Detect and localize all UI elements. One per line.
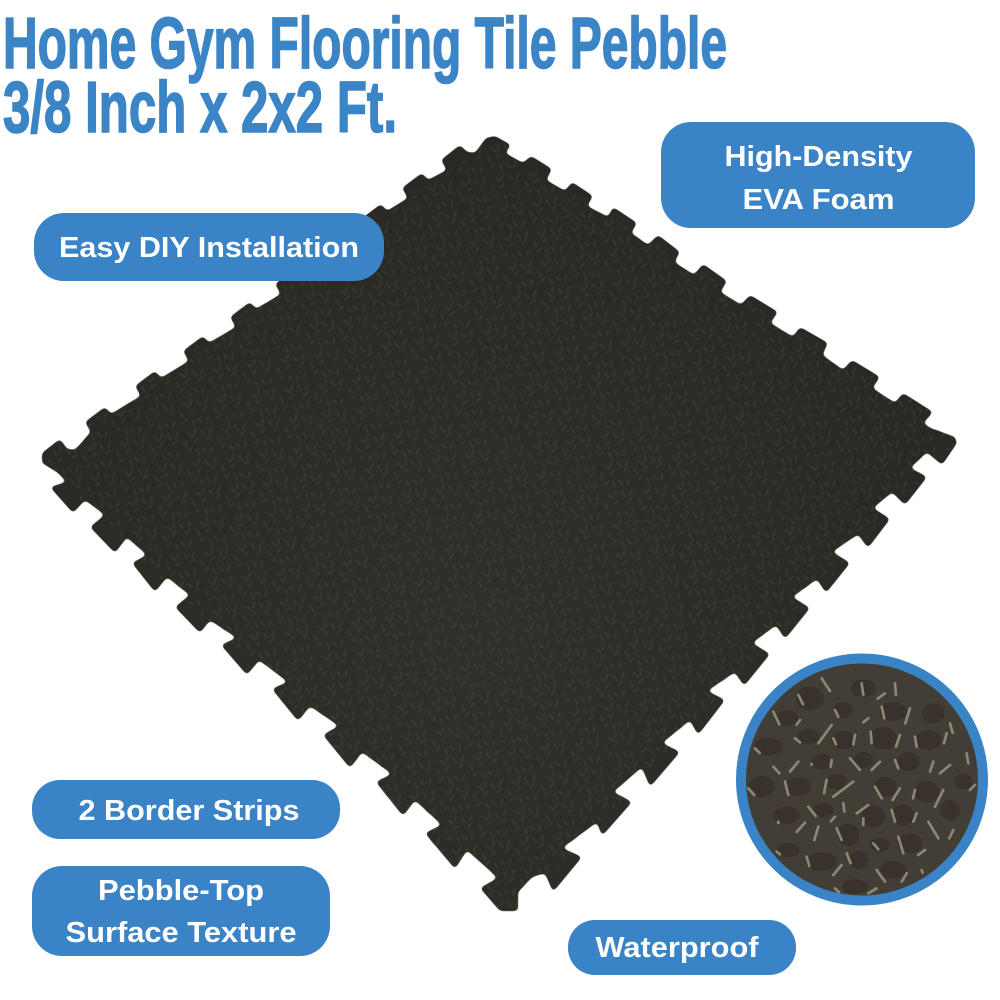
callout: waterproof bbox=[568, 920, 796, 975]
callout: 2 border strips: 2 Border Strips bbox=[78, 795, 300, 827]
callout: high-density EVA foam: High-Density bbox=[724, 141, 912, 173]
callout: high-density EVA foam bbox=[661, 122, 975, 228]
callout: pebble-top surface texture bbox=[32, 866, 330, 956]
title: 3/8 Inch x 2x2 Ft. bbox=[3, 68, 397, 148]
product: pebble foam floor tile bbox=[42, 136, 957, 911]
inset: close-up of pebble texture bbox=[741, 658, 983, 900]
title bbox=[3, 4, 727, 148]
callout: high-density EVA foam: EVA Foam bbox=[742, 184, 894, 216]
callout: 2 border strips bbox=[32, 780, 340, 839]
callout: pebble-top surface texture: Surface Texture bbox=[66, 917, 296, 949]
callout: pebble-top surface texture: Pebble-Top bbox=[98, 875, 264, 907]
callout: easy DIY installation bbox=[34, 213, 384, 281]
callout: waterproof: Waterproof bbox=[596, 932, 759, 964]
callout: easy DIY installation: Easy DIY Installation bbox=[59, 232, 359, 264]
